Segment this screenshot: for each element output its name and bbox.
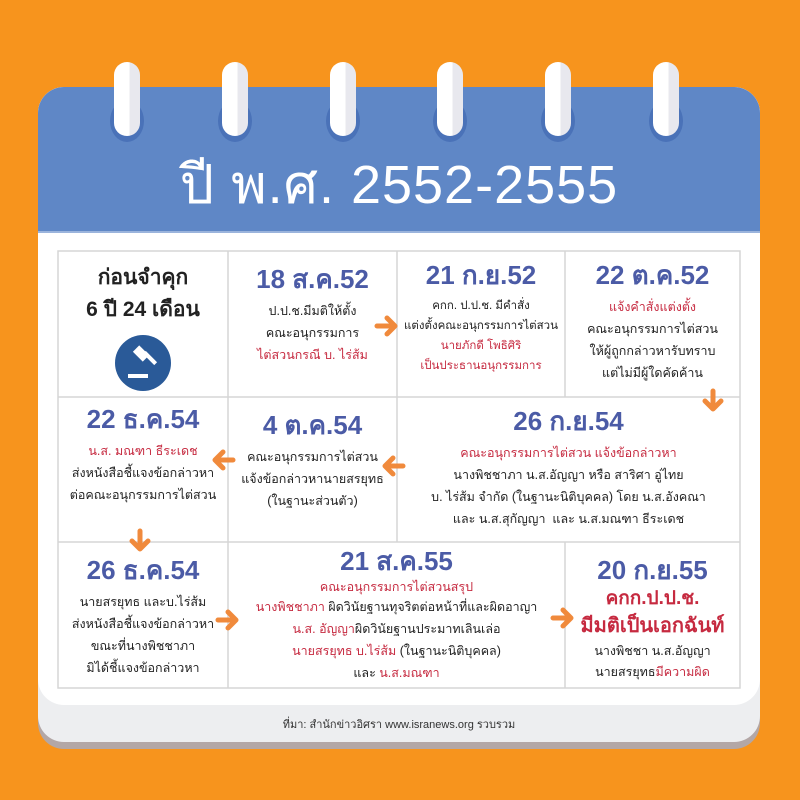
cell: 20 Sep 55: นางพิชชา น.ส.อัญญา	[594, 644, 711, 658]
cell: 20 Sep 55: มีมติเป็นเอกฉันท์	[580, 615, 724, 637]
cell: 22 Oct 52	[587, 260, 718, 380]
cell: 21 Sep 52: 21 ก.ย.52	[426, 260, 536, 290]
cell: 4 Oct 54: แจ้งข้อกล่าวหานายสรยุทธ	[241, 472, 384, 486]
cell: 21 Sep 52: แต่งตั้งคณะอนุกรรมการไต่สวน	[404, 320, 558, 332]
cell: 4 Oct 54: (ในฐานะส่วนตัว)	[267, 494, 358, 508]
cell: 22 Oct 52: 22 ต.ค.52	[596, 260, 709, 290]
title: ปี พ.ศ. 2552-2555	[180, 155, 618, 215]
cell: 21 Aug 55: และ น.ส.มณฑา	[353, 666, 440, 680]
icon: gavel	[115, 335, 171, 391]
cell: 26 Dec 54: ส่งหนังสือชี้แจงข้อกล่าวหา	[72, 617, 214, 631]
cell: 22 Dec 54: น.ส. มณฑา ธีระเดช	[88, 444, 198, 458]
cell: 22 Oct 52: แต่ไม่มีผู้ใดคัดค้าน	[602, 366, 703, 380]
cell: 22 Oct 52: คณะอนุกรรมการไต่สวน	[587, 322, 718, 336]
cell: 26 Sep 54: และ น.ส.สุกัญญา และ น.ส.มณฑา ธีระเดช	[453, 512, 684, 526]
cell: before jail	[86, 266, 200, 391]
cell: 21 Sep 52: คกก. ป.ป.ช. มีคำสั่ง	[432, 300, 530, 312]
footer panel	[38, 87, 760, 742]
cell: 26 Dec 54: ขณะที่นางพิชชาภา	[91, 639, 195, 653]
cell: 4 Oct 54	[241, 410, 384, 508]
arrow: 26 Sep to 4 Oct	[382, 456, 406, 476]
cell: 21 Aug 55	[256, 546, 537, 680]
cell: 21 Aug 55: คณะอนุกรรมการไต่สวนสรุป	[320, 580, 473, 594]
cell: 18 Aug 52: ไต่สวนกรณี บ. ไร่ส้ม	[257, 348, 368, 362]
cell: 4 Oct 54: คณะอนุกรรมการไต่สวน	[247, 450, 378, 464]
cell: 22 Dec 54	[70, 404, 216, 502]
cell: before jail: 6 ปี 24 เดือน	[86, 298, 200, 321]
cell: 21 Sep 52	[404, 260, 558, 372]
cell: 18 Aug 52	[256, 264, 369, 362]
cell: 21 Aug 55: 21 ส.ค.55	[340, 546, 453, 576]
cell: 21 Aug 55: น.ส. อัญญาผิดวินัยฐานประมาทเลินเล่อ	[292, 622, 500, 636]
footer source text: ที่มา: สำนักข่าวอิศรา www.isranews.org รวบรวม	[283, 719, 515, 731]
arrow: 26 Dec to 21 Aug	[216, 610, 238, 630]
cell: 26 Dec 54: นายสรยุทธ และบ.ไร่ส้ม	[80, 595, 206, 609]
cell: 21 Aug 55: นายสรยุทธ บ.ไร่ส้ม (ในฐานะนิติบุคคล)	[292, 644, 501, 658]
cell: 21 Sep 52: นายภักดี โพธิศิริ	[441, 340, 521, 352]
cell: before jail: ก่อนจำคุก	[98, 266, 188, 289]
cell: 26 Sep 54	[431, 406, 706, 526]
cell: 20 Sep 55: คกก.ป.ป.ช.	[606, 588, 699, 609]
cell: 26 Dec 54: มิได้ชี้แจงข้อกล่าวหา	[86, 661, 200, 675]
cell: 18 Aug 52: คณะอนุกรรมการ	[266, 326, 359, 340]
cell: 18 Aug 52: ป.ป.ช.มีมติให้ตั้ง	[269, 304, 356, 318]
cell: 26 Sep 54: บ. ไร่ส้ม จำกัด (ในฐานะนิติบุคคล) โดย น.ส.อังคณา	[431, 490, 706, 504]
arrow: down from 22 Oct	[702, 388, 724, 412]
blue header	[38, 87, 760, 233]
cell: 26 Dec 54	[72, 555, 214, 675]
calendar card	[38, 87, 760, 749]
cell: 22 Dec 54: ส่งหนังสือชี้แจงข้อกล่าวหา	[72, 466, 214, 480]
cell: 20 Sep 55: 20 ก.ย.55	[597, 555, 708, 585]
cell: 22 Dec 54: 22 ธ.ค.54	[87, 404, 199, 434]
cell: 21 Sep 52: เป็นประธานอนุกรรมการ	[420, 360, 542, 372]
cell: 21 Aug 55: นางพิชชาภา ผิดวินัยฐานทุจริตต่อหน้าที่และผิดอาญา	[256, 600, 537, 614]
cell: 26 Sep 54: นางพิชชาภา น.ส.อัญญา หรือ สาริศา อู่ไทย	[453, 468, 684, 482]
cell: 26 Sep 54: คณะอนุกรรมการไต่สวน แจ้งข้อกล่าวหา	[460, 446, 677, 460]
cell: 20 Sep 55: นายสรยุทธมีความผิด	[595, 665, 710, 679]
arrow: 4 Oct to 22 Dec	[212, 450, 236, 470]
cell: 22 Dec 54: ต่อคณะอนุกรรมการไต่สวน	[70, 488, 216, 502]
arrow: down from 22 Dec	[130, 528, 150, 552]
cell: 18 Aug 52: 18 ส.ค.52	[256, 264, 369, 294]
cell: 4 Oct 54: 4 ต.ค.54	[263, 410, 362, 440]
rings	[110, 62, 683, 142]
cell: 22 Oct 52: แจ้งคำสั่งแต่งตั้ง	[609, 300, 696, 314]
cell: 26 Dec 54: 26 ธ.ค.54	[87, 555, 199, 585]
arrow: 18 Aug to 21 Sep	[374, 316, 398, 336]
cell: 22 Oct 52: ให้ผู้ถูกกล่าวหารับทราบ	[590, 344, 715, 358]
white body	[38, 87, 760, 705]
card shadow	[38, 95, 760, 749]
arrow: 21 Aug to 20 Sep	[550, 608, 574, 628]
cell: 20 Sep 55	[580, 555, 724, 680]
cell: 26 Sep 54: 26 ก.ย.54	[513, 406, 624, 436]
